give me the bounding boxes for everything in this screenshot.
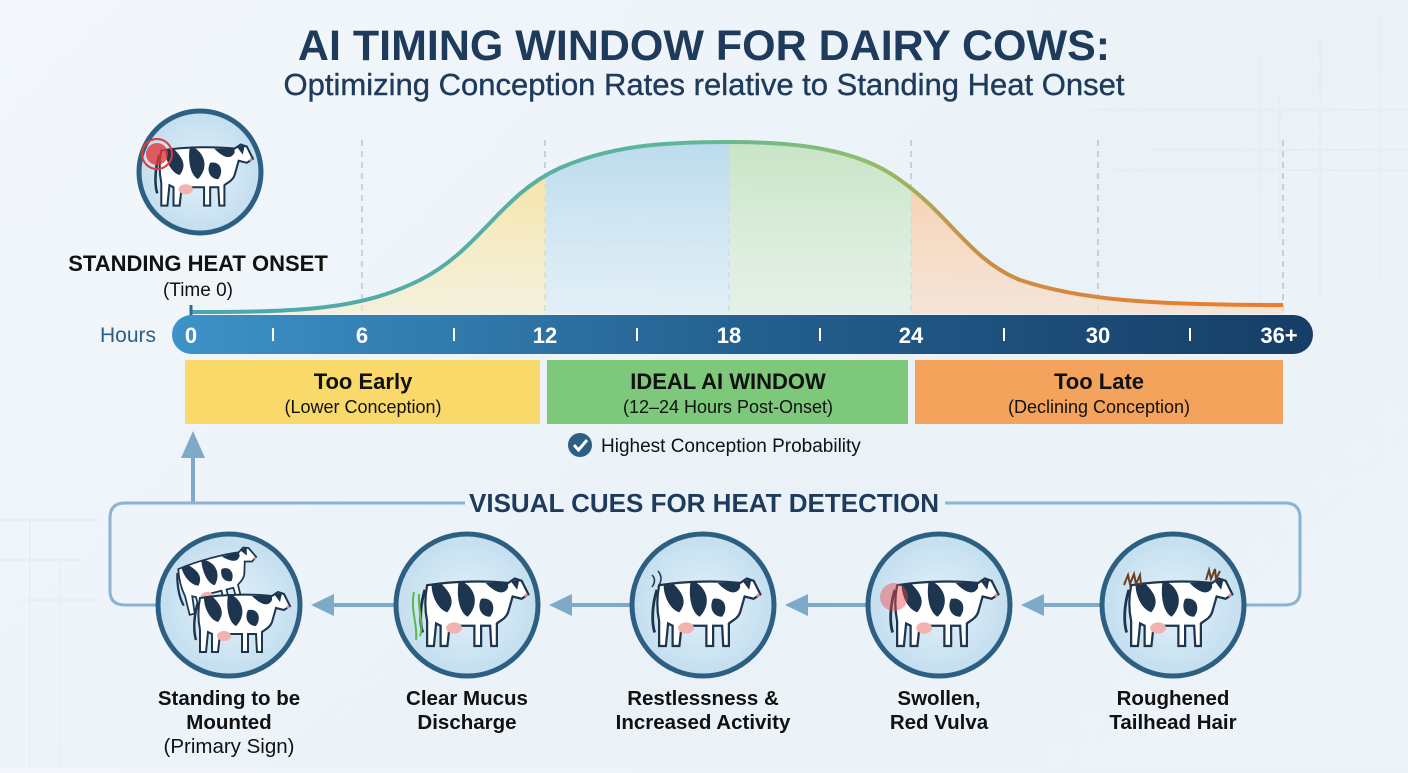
callout: highest conception probability: Highest Conception Probability [601, 436, 861, 457]
arrows between cues [311, 594, 1103, 616]
cue: standing to be mounted: (Primary Sign) [164, 735, 294, 758]
icon: standing heat onset cow [139, 111, 261, 233]
cue: swollen red vulva: Red Vulva [890, 711, 989, 734]
box: ideal AI window: IDEAL AI WINDOW [630, 369, 826, 394]
timeline bar: 12 [533, 323, 557, 348]
timeline bar: 18 [717, 323, 741, 348]
label: hours: Hours [100, 324, 156, 347]
loop connector frame [110, 503, 1300, 605]
cue: standing to be mounted: Mounted [186, 711, 272, 734]
label: standing heat onset [68, 251, 328, 301]
cue: restlessness [616, 534, 791, 734]
box: too late [915, 360, 1283, 424]
timeline bar: 30 [1086, 323, 1110, 348]
cue: clear mucus discharge [396, 534, 538, 734]
heading: visual cues: VISUAL CUES FOR HEAT DETECTION [469, 488, 939, 518]
cue: clear mucus discharge: Discharge [417, 711, 517, 734]
timeline bar: 24 [899, 323, 924, 348]
label: standing heat onset: STANDING HEAT ONSET [68, 251, 328, 276]
title: AI TIMING WINDOW FOR DAIRY COWS: [298, 22, 1110, 70]
timeline bar [172, 305, 1313, 354]
label: standing heat onset: (Time 0) [163, 280, 233, 301]
cue: clear mucus discharge: Clear Mucus [406, 687, 528, 710]
box: too late: Too Late [1054, 369, 1144, 394]
cue: swollen red vulva [868, 534, 1010, 734]
cue: roughened tailhead hair [1102, 534, 1244, 734]
title [284, 22, 1125, 102]
cue: roughened tailhead hair: Tailhead Hair [1109, 711, 1237, 734]
timeline bar: 36+ [1260, 323, 1298, 348]
timeline bar: 0 [185, 323, 197, 348]
cue: standing to be mounted [158, 534, 300, 758]
cue: restlessness: Increased Activity [616, 711, 791, 734]
box: too early [185, 360, 540, 424]
box: ideal AI window [547, 360, 908, 424]
box: too late: (Declining Conception) [1008, 397, 1190, 417]
dashed grid lines [362, 140, 1283, 312]
cue: standing to be mounted: Standing to be [158, 687, 300, 710]
box: ideal AI window: (12–24 Hours Post-Onset) [623, 397, 833, 417]
chart: conception probability curve [190, 130, 1283, 320]
cue: swollen red vulva: Swollen, [897, 687, 981, 710]
arrow: up to time 0 [181, 431, 205, 503]
title: Optimizing Conception Rates relative to Standing Heat Onset [284, 67, 1125, 102]
timeline bar: 6 [356, 323, 368, 348]
box: too early: (Lower Conception) [284, 397, 442, 417]
box: too early: Too Early [314, 369, 413, 394]
cue: roughened tailhead hair: Roughened [1117, 687, 1229, 710]
cue: restlessness: Restlessness & [627, 687, 779, 710]
